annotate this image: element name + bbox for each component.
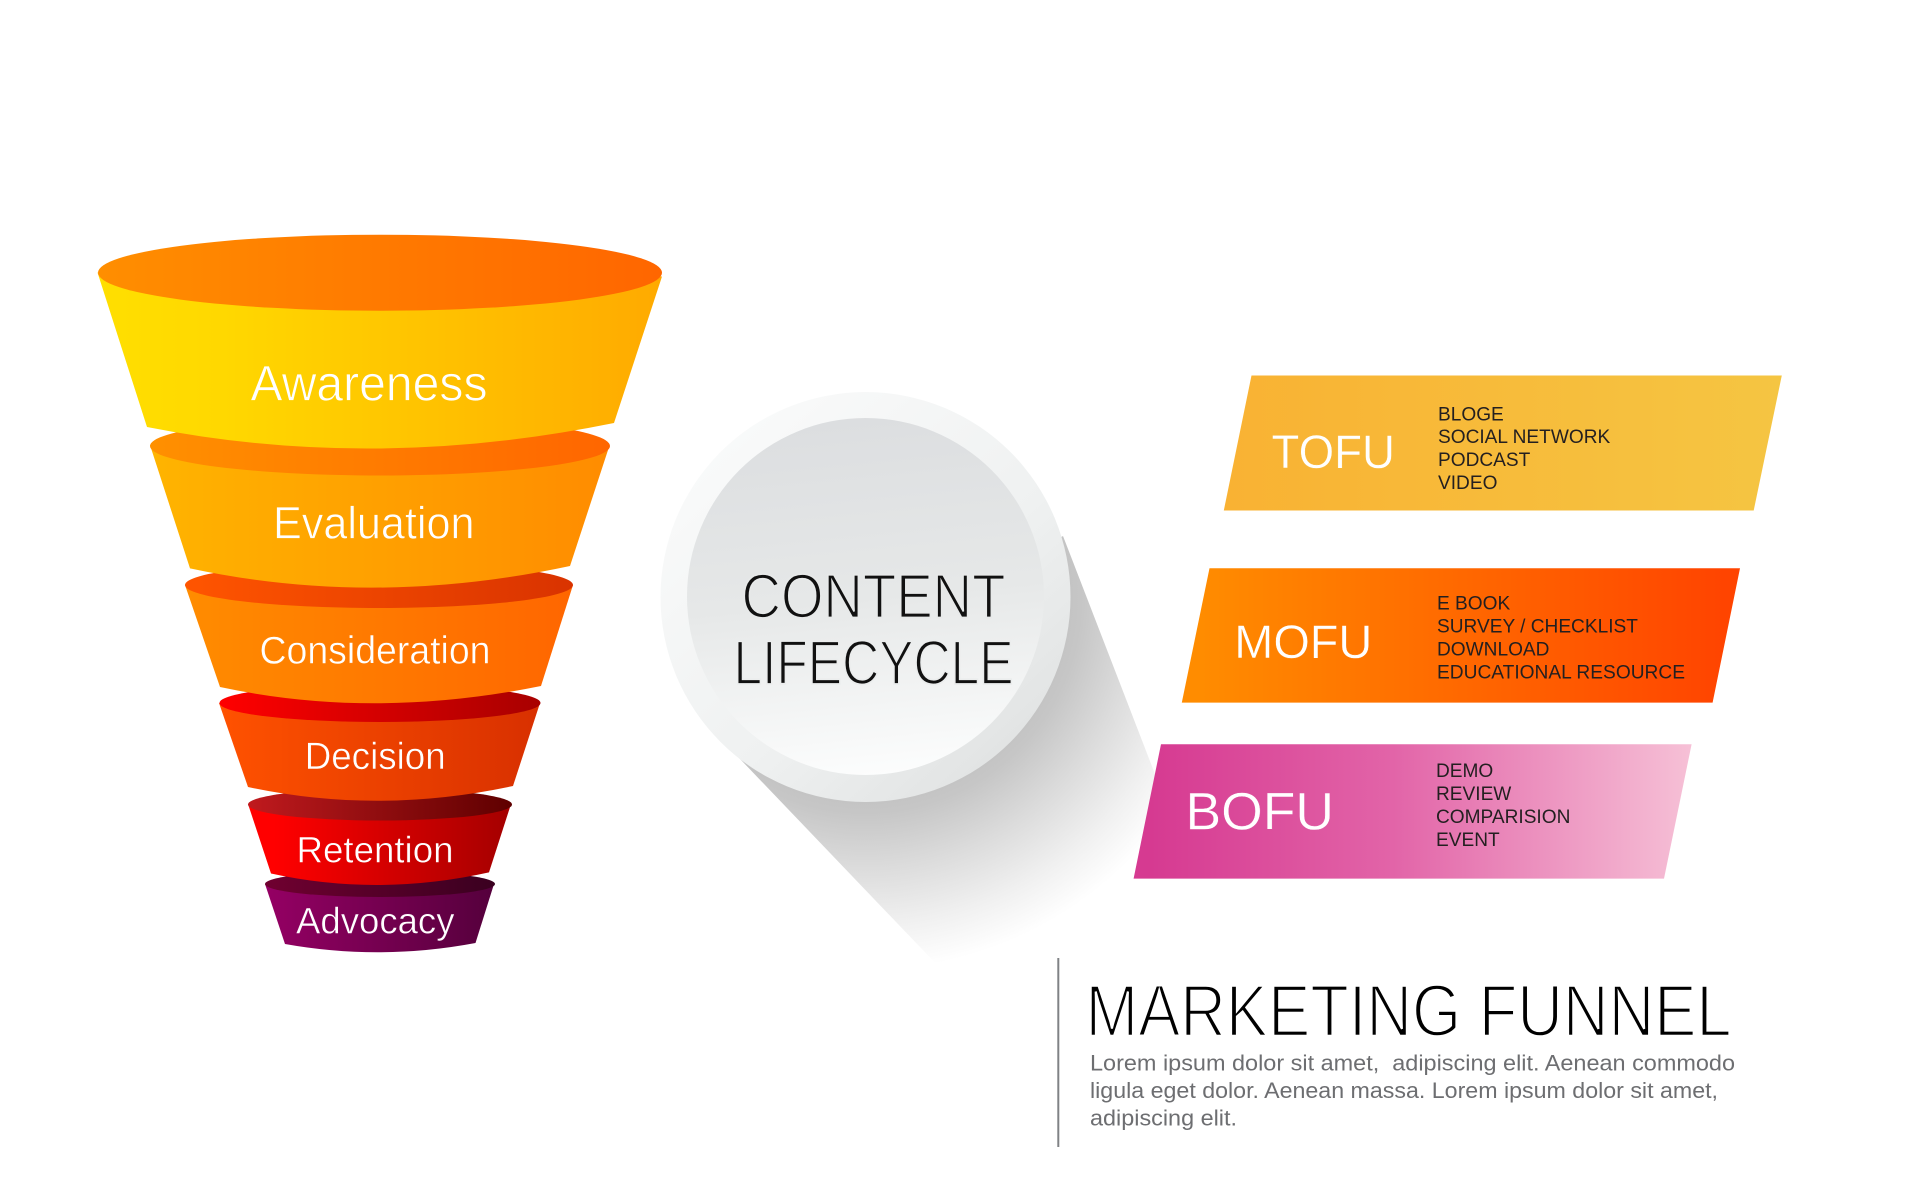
funnel stage: Advocacy <box>265 871 495 952</box>
description: ligula eget dolor. Aenean massa. Lorem ipsum dolor sit amet, <box>1090 1078 1718 1103</box>
circle label: LIFECYCLE <box>734 629 1014 698</box>
BOFU list: COMPARISION <box>1436 807 1570 828</box>
banner: BOFU: BOFU <box>1186 782 1334 841</box>
BOFU list <box>1436 761 1570 851</box>
circle: content lifecycle <box>660 392 1165 971</box>
TOFU list: PODCAST <box>1438 450 1531 471</box>
TOFU list <box>1438 404 1610 494</box>
banner: TOFU: TOFU <box>1272 425 1395 478</box>
description: adipiscing elit. <box>1090 1106 1237 1131</box>
funnel stage: Decision <box>219 684 540 801</box>
funnel stage: Awareness <box>98 235 662 449</box>
MOFU list: EDUCATIONAL RESOURCE <box>1437 662 1685 684</box>
BOFU list: REVIEW <box>1436 784 1511 805</box>
MOFU list <box>1437 594 1685 684</box>
outer ring <box>660 392 1070 802</box>
funnel stage: Retention <box>248 788 512 885</box>
funnel stage: Evaluation <box>150 416 610 588</box>
BOFU list: DEMO <box>1436 761 1493 782</box>
funnel stage: Retention: Retention <box>296 830 454 870</box>
long cast shadow <box>720 536 1165 971</box>
banner: MOFU: MOFU <box>1234 615 1372 668</box>
circle label: CONTENT <box>742 563 1006 632</box>
TOFU list: VIDEO <box>1438 473 1497 494</box>
funnel <box>98 235 662 952</box>
funnel stage: Consideration <box>185 562 573 703</box>
banner: TOFU <box>1224 376 1782 510</box>
circle label <box>734 563 1014 698</box>
funnel stage: Decision: Decision <box>305 736 446 778</box>
MOFU list: E BOOK <box>1437 594 1510 615</box>
description <box>1090 1051 1735 1131</box>
banner: MOFU <box>1182 568 1740 703</box>
TOFU list: SOCIAL NETWORK <box>1438 427 1610 448</box>
funnel stage: Consideration: Consideration <box>260 630 490 672</box>
MOFU list: SURVEY / CHECKLIST <box>1437 617 1638 638</box>
vertical rule <box>1057 958 1059 1147</box>
description: Lorem ipsum dolor sit amet, adipiscing elit. Aenean commodo <box>1090 1051 1735 1076</box>
title: MARKETING FUNNEL <box>1086 971 1732 1052</box>
MOFU list: DOWNLOAD <box>1437 640 1549 660</box>
BOFU list: EVENT <box>1436 830 1500 851</box>
funnel stage: Awareness: Awareness <box>250 355 488 411</box>
funnel stage: Advocacy: Advocacy <box>296 901 455 942</box>
title block <box>1057 958 1735 1147</box>
TOFU list: BLOGE <box>1438 404 1504 425</box>
banner: BOFU <box>1134 744 1692 879</box>
inner disc <box>687 418 1044 775</box>
funnel stage: Evaluation: Evaluation <box>273 497 474 548</box>
